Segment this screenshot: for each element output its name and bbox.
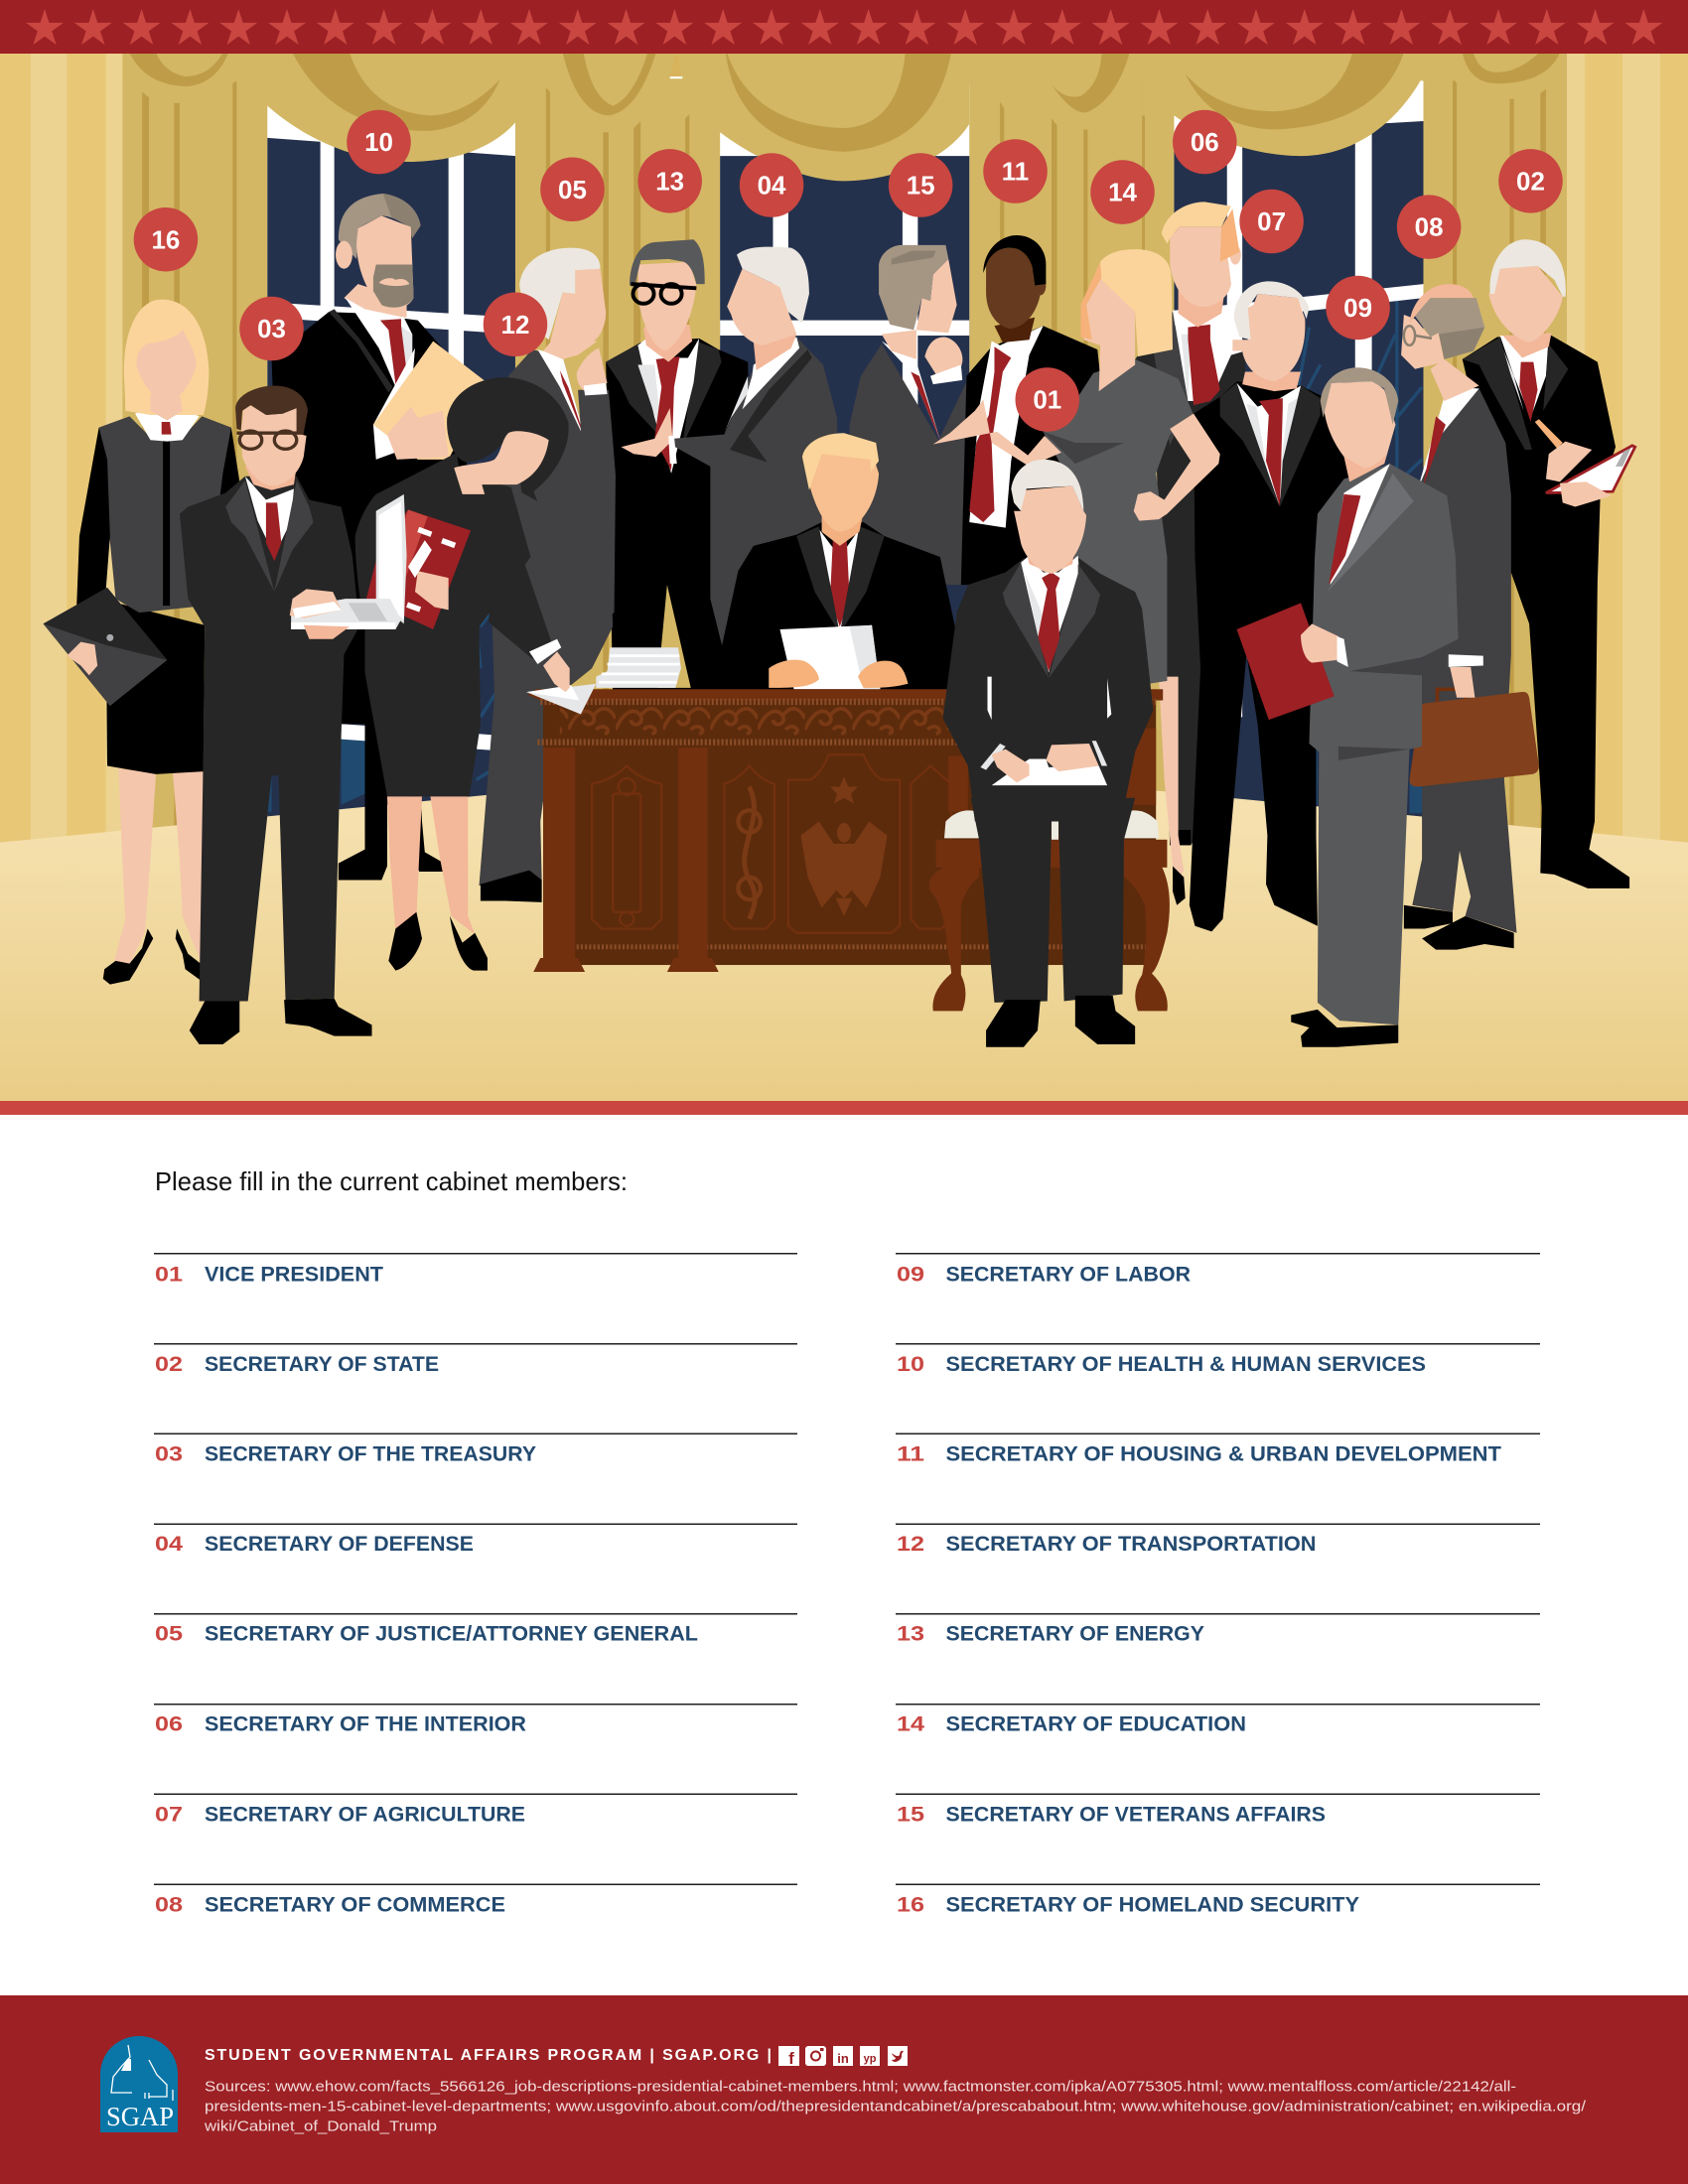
row 01	[154, 1253, 797, 1287]
badge 02: 02	[1516, 168, 1545, 196]
badge 03: 03	[257, 316, 286, 343]
person 06: tall blond man	[1135, 202, 1246, 845]
row 01: 01	[155, 1263, 183, 1287]
row 08: 08	[155, 1892, 183, 1916]
badge 14	[1090, 160, 1155, 224]
numbered badges	[134, 110, 1563, 432]
badge 15	[889, 153, 952, 217]
badge 11: 11	[1002, 159, 1029, 187]
row 08: SECRETARY OF COMMERCE	[205, 1892, 505, 1916]
sources text: wiki/Cabinet_of_Donald_Trump	[204, 2118, 437, 2134]
badge 07	[1239, 190, 1304, 253]
SGAP logo	[100, 2036, 178, 2132]
row 03: SECRETARY OF THE TREASURY	[205, 1441, 536, 1465]
instruction text: Please fill in the current cabinet members:	[155, 1166, 628, 1196]
facebook icon: f	[788, 2049, 794, 2068]
person 14: blonde woman in gray dress	[933, 249, 1220, 905]
row 06: 06	[155, 1711, 183, 1735]
resolute desk	[528, 689, 1163, 972]
row 10: 10	[897, 1352, 924, 1376]
floor	[0, 760, 1688, 1101]
right column: positions 09-16	[896, 1253, 1540, 1916]
row 03	[154, 1433, 797, 1465]
SGAP logo: SGAP	[106, 2102, 174, 2131]
row 12	[896, 1523, 1540, 1556]
badge 03	[239, 297, 304, 360]
person 07: balding man in black suit	[1190, 281, 1358, 931]
row 07: SECRETARY OF AGRICULTURE	[205, 1803, 525, 1827]
row 11: 11	[897, 1441, 924, 1465]
badge 01: 01	[1033, 387, 1061, 415]
person 11: man with dark skin	[961, 235, 1100, 585]
row 04: SECRETARY OF DEFENSE	[205, 1532, 474, 1556]
badge 04	[740, 153, 803, 217]
row 07	[154, 1793, 797, 1827]
red folder	[1237, 603, 1335, 720]
person 02: man with clipboard	[1463, 239, 1635, 888]
sources text: Sources: www.ehow.com/facts_5566126_job-descriptions-presidential-cabinet-members.html; www.factmonster.com/ipka/A0775305.html; www.mentalfloss.com/article/22142/all-	[205, 2079, 1516, 2095]
president's chair	[929, 729, 1170, 1011]
row 13: 13	[897, 1622, 924, 1646]
person 03: man with glasses holding laptop	[180, 386, 407, 1044]
badge 09	[1326, 276, 1390, 340]
row 16: SECRETARY OF HOMELAND SECURITY	[945, 1892, 1359, 1916]
row 05	[154, 1613, 797, 1646]
row 03: 03	[155, 1441, 183, 1465]
badge 05: 05	[558, 177, 587, 205]
badge 13: 13	[655, 168, 684, 196]
badge 12	[484, 293, 547, 356]
badge 10: 10	[364, 129, 393, 157]
row 15: 15	[897, 1803, 924, 1827]
badge 16: 16	[151, 226, 180, 254]
row 07: 07	[155, 1803, 183, 1827]
person 12: white haired man with hand on chin	[480, 248, 616, 902]
person 01: seated vice president	[943, 460, 1153, 1047]
clipboard	[1535, 419, 1635, 507]
desk panels	[592, 754, 951, 933]
row 02: SECRETARY OF STATE	[205, 1352, 439, 1376]
president	[720, 433, 961, 696]
badge 01	[1016, 367, 1079, 432]
program title: STUDENT GOVERNMENTAL AFFAIRS PROGRAM | SGAP.ORG |	[205, 2047, 772, 2064]
badge 09: 09	[1343, 295, 1372, 323]
row 13: SECRETARY OF ENERGY	[945, 1622, 1204, 1646]
twitter icon	[888, 2046, 908, 2066]
row 12: 12	[897, 1532, 924, 1556]
badge 06: 06	[1191, 129, 1219, 157]
row 04	[154, 1523, 797, 1556]
wall and side stripes	[0, 53, 1688, 847]
badge 08	[1397, 195, 1461, 259]
badge 16	[134, 207, 198, 272]
footer	[0, 1995, 1688, 2184]
badge 15: 15	[907, 173, 935, 201]
row 11	[896, 1433, 1540, 1465]
badge 10	[347, 110, 411, 174]
briefcase	[1409, 654, 1539, 786]
person 13: man with black glasses	[606, 239, 752, 696]
badge 11	[983, 139, 1048, 204]
row 04: 04	[155, 1532, 183, 1556]
stack of papers	[596, 647, 681, 688]
row 11: SECRETARY OF HOUSING & URBAN DEVELOPMENT	[945, 1441, 1501, 1465]
row 12: SECRETARY OF TRANSPORTATION	[945, 1532, 1317, 1556]
person 08: man with briefcase	[1401, 284, 1539, 950]
row 09: 09	[897, 1263, 924, 1287]
oval office illustration scene	[0, 53, 1688, 1101]
row 05: 05	[155, 1622, 183, 1646]
row 01: VICE PRESIDENT	[205, 1263, 383, 1287]
sources text	[204, 2079, 1587, 2134]
badge 05	[540, 157, 605, 221]
row 05: SECRETARY OF JUSTICE/ATTORNEY GENERAL	[205, 1622, 698, 1646]
badge 14: 14	[1108, 180, 1138, 207]
folder in hand	[373, 341, 488, 460]
presidential eagle seal	[801, 777, 887, 916]
badge 02	[1498, 149, 1563, 213]
row 15: SECRETARY OF VETERANS AFFAIRS	[945, 1803, 1326, 1827]
row 06	[154, 1704, 797, 1735]
badge 04: 04	[758, 173, 786, 201]
top star band	[0, 0, 1688, 54]
badge 07: 07	[1257, 208, 1286, 236]
instagram icon	[805, 2046, 826, 2066]
row 10: SECRETARY OF HEALTH & HUMAN SERVICES	[945, 1352, 1426, 1376]
windows with night sky	[267, 69, 1423, 822]
badge 08: 08	[1415, 214, 1444, 242]
row 13	[896, 1613, 1540, 1646]
valance swags	[122, 53, 1567, 181]
person 05: dark haired woman bending	[355, 377, 596, 971]
sources text: presidents-men-15-cabinet-level-departments; www.usgovinfo.about.com/od/thepresidentandcabinet/a/prescababout.htm; www.whitehouse.gov/administration/cabinet; en.wikipedia.org/	[205, 2099, 1587, 2115]
row 06: SECRETARY OF THE INTERIOR	[205, 1711, 526, 1735]
badge 12: 12	[501, 312, 529, 340]
row 14	[896, 1704, 1540, 1735]
red band under illustration	[0, 1101, 1688, 1115]
badge 06	[1173, 110, 1237, 174]
row 15	[896, 1793, 1540, 1827]
row 16	[896, 1884, 1540, 1916]
black clutch	[43, 588, 167, 706]
person 10: bearded man	[272, 194, 488, 880]
person 04: white haired man gesturing	[622, 247, 840, 654]
pinterest icon: yp	[864, 2053, 877, 2065]
row 08	[154, 1884, 797, 1916]
row 09: SECRETARY OF LABOR	[945, 1263, 1191, 1287]
row 14: 14	[897, 1711, 924, 1735]
person 16: blonde woman in jacket with clutch	[43, 300, 239, 985]
red binder	[366, 509, 471, 629]
row 16: 16	[897, 1892, 924, 1916]
left column: positions 01-08	[154, 1253, 797, 1916]
linkedin icon: in	[837, 2051, 849, 2066]
badge 13	[637, 149, 702, 213]
person 15: gray haired man with raised fist	[850, 245, 968, 585]
row 02: 02	[155, 1352, 183, 1376]
row 02	[154, 1343, 797, 1376]
row 10	[896, 1343, 1540, 1376]
social icons	[778, 2046, 908, 2068]
curtain panels	[122, 53, 1567, 836]
row 14: SECRETARY OF EDUCATION	[945, 1711, 1246, 1735]
row 09	[896, 1253, 1540, 1287]
person 09: man in gray suit with red folder	[1237, 367, 1459, 1047]
laptop	[290, 494, 407, 639]
